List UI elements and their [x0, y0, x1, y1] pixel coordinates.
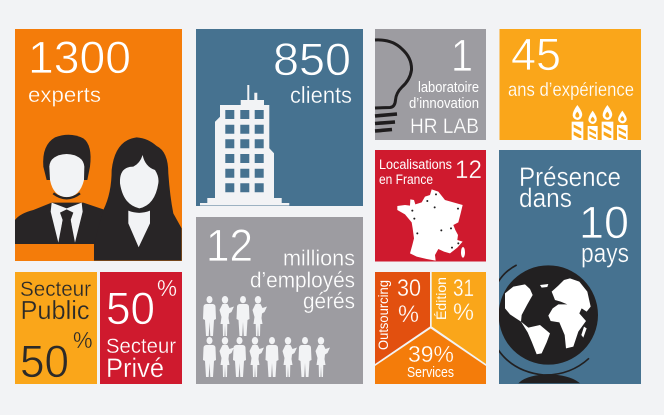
icon: four candles: [572, 105, 628, 140]
number: 50: 50: [106, 283, 155, 334]
number: 45: 45: [511, 29, 561, 80]
panel: secteur public: [15, 272, 97, 387]
map: France with office dots: [397, 189, 465, 261]
label: Présence: Présence: [519, 162, 621, 192]
segment: services: 39%: [408, 341, 454, 367]
label: Public: Public: [20, 295, 90, 325]
label: Privé: Privé: [106, 353, 164, 383]
panel: localisations en France: [375, 150, 486, 262]
number: 850: 850: [273, 34, 351, 85]
segment: outsourcing: 30: [397, 275, 421, 302]
label: dans: dans: [519, 183, 572, 213]
label: HR LAB: HR LAB: [410, 115, 479, 138]
number: 12: 12: [455, 156, 482, 184]
label: en France: en France: [379, 172, 433, 187]
segment: outsourcing: [375, 272, 430, 364]
panel: 1300 experts: [15, 29, 182, 261]
label: experts: experts: [28, 84, 101, 107]
number: 10: 10: [579, 197, 629, 248]
segment: outsourcing: Outsourcing: [376, 280, 391, 350]
icon: globe: [498, 265, 598, 383]
label: d'employés: d’employés: [250, 268, 355, 292]
segment: outsourcing: %: [398, 301, 419, 328]
icon: light bulb: [375, 40, 412, 131]
panel: secteur privé: [100, 272, 182, 384]
label: clients: clients: [290, 82, 352, 108]
number: 12: 12: [206, 220, 253, 271]
segment: services: [375, 328, 486, 384]
panel: 12 millions d'employés gérés: [196, 217, 363, 384]
panel: laboratoire d'innovation: [375, 29, 486, 140]
label: millions: millions: [283, 246, 355, 270]
panel: présence dans 10 pays: [498, 150, 641, 384]
label: Secteur: Secteur: [106, 335, 176, 358]
panel: 45 ans d'expérience: [500, 29, 641, 140]
panel: 850 clients: [196, 29, 363, 206]
segment: édition: [432, 272, 486, 364]
icon: office building: [200, 85, 289, 206]
number: 1300: 1300: [28, 32, 131, 83]
percent sign: %: [73, 327, 92, 353]
percent sign: %: [157, 275, 177, 301]
segment: édition: 31: [453, 275, 474, 302]
label: pays: pays: [581, 238, 629, 268]
icon: rows of employees: [203, 296, 330, 377]
number: 1: 1: [451, 30, 473, 81]
segment: édition: Édition: [433, 277, 449, 320]
icon: man silhouette: [15, 135, 110, 244]
label: gérés: gérés: [303, 288, 355, 314]
segment: services: Services: [407, 365, 454, 381]
number: 50: 50: [20, 336, 69, 387]
label: ans d'expérience: ans d’expérience: [508, 80, 634, 101]
label: d'innovation: d’innovation: [409, 96, 479, 112]
label: Localisations: Localisations: [379, 157, 452, 172]
segment: édition: %: [453, 299, 474, 326]
label: Secteur Public: Secteur: [20, 278, 91, 301]
panel: activity split: [375, 272, 486, 384]
icon: woman silhouette: [94, 137, 182, 261]
label: laboratoire: laboratoire: [418, 80, 479, 96]
